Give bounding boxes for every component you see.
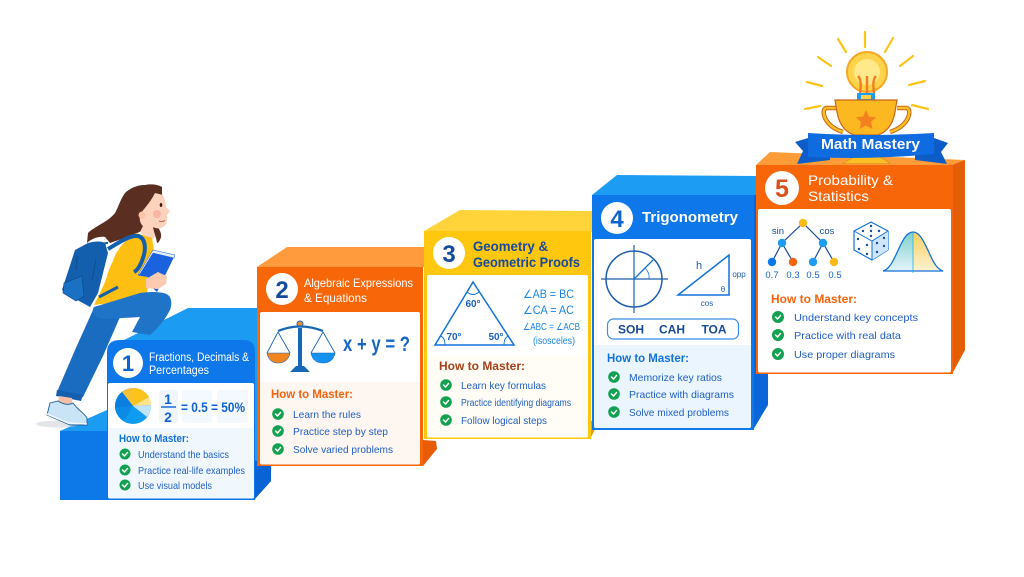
title 3: Geometry & xyxy=(473,238,548,254)
step 5: probability and statistics xyxy=(756,152,965,374)
badge 2 xyxy=(266,273,298,305)
trophy with light bulb and Math Mastery ribbon xyxy=(795,32,948,164)
probability tree: sin xyxy=(772,226,784,237)
how to master 4: How to Master: xyxy=(607,351,689,365)
SOH CAH TOA box: CAH xyxy=(659,322,685,336)
how to master 4: Solve mixed problems xyxy=(629,407,729,419)
icon: dice xyxy=(854,222,888,260)
title 1: Percentages xyxy=(149,365,209,377)
content card 3 xyxy=(427,275,588,438)
triangle diagram: 60° xyxy=(465,299,481,310)
ankle xyxy=(58,396,72,406)
badge 2: 2 xyxy=(275,277,289,304)
right triangle diagram: cos xyxy=(701,299,713,308)
how to master 5: Practice with real data xyxy=(794,330,901,342)
how to master 3: Practice identifying diagrams xyxy=(461,397,571,409)
step 4: trigonometry xyxy=(592,175,768,430)
unit circle diagram xyxy=(601,245,668,313)
isosceles proof: ∠CA = AC xyxy=(523,305,574,317)
badge 5: 5 xyxy=(775,175,789,203)
content card 4 xyxy=(594,239,751,428)
SOH CAH TOA box: SOH xyxy=(618,322,644,336)
right triangle diagram xyxy=(678,255,746,308)
how to master 1: Use visual models xyxy=(138,480,212,492)
title 3: Geometric Proofs xyxy=(473,254,580,270)
fraction equation: = 0.5 = 50% xyxy=(181,399,245,415)
how to master 5: Use proper diagrams xyxy=(794,349,895,361)
title 5 xyxy=(808,172,894,204)
block 3D shape xyxy=(592,175,768,430)
isosceles proof: ∠ABC = ∠ACB xyxy=(523,322,580,333)
book xyxy=(138,250,175,292)
title 1 xyxy=(149,352,249,377)
how to master 4 xyxy=(607,351,734,419)
step 2: algebraic expressions and equations xyxy=(257,247,437,466)
ribbon: Math Mastery xyxy=(795,133,948,164)
how to master 3: Learn key formulas xyxy=(461,380,546,392)
ribbon: Math Mastery: Math Mastery xyxy=(821,136,921,153)
SOH CAH TOA box: TOA xyxy=(701,322,727,336)
triangle diagram: 50° xyxy=(488,332,504,343)
how to master 4: Practice with diagrams xyxy=(629,389,734,401)
probability tree: 0.5 xyxy=(806,270,820,281)
arm xyxy=(106,243,148,289)
block 3D shape xyxy=(424,210,598,439)
character: student climbing with backpack and book xyxy=(36,184,175,428)
icon: light bulb xyxy=(847,52,887,100)
how to master 2: Practice step by step xyxy=(293,426,388,438)
content card 1 xyxy=(108,383,254,498)
title 3 xyxy=(473,238,580,270)
how to master 1 xyxy=(119,433,245,492)
badge 3 xyxy=(433,237,465,269)
yellow shirt xyxy=(94,233,154,305)
equation x + y = ?: x + y = ? xyxy=(343,333,410,356)
backpack straps xyxy=(108,236,145,272)
how to master 1: Practice real-life examples xyxy=(138,465,245,477)
how to master 3 xyxy=(439,359,571,427)
shoe xyxy=(47,401,87,425)
right triangle diagram: h xyxy=(696,260,702,272)
title 4: Trigonometry xyxy=(642,209,739,226)
title 2 xyxy=(304,276,413,305)
how to master 1: How to Master: xyxy=(119,433,189,445)
step 3: geometry and geometric proofs xyxy=(424,210,598,439)
how to master 1: Understand the basics xyxy=(138,449,229,461)
fraction equation xyxy=(159,390,248,425)
how to master 4: Memorize key ratios xyxy=(629,372,722,384)
content card 2 xyxy=(260,312,420,464)
how to master 3: How to Master: xyxy=(439,359,525,373)
probability tree: 0.3 xyxy=(786,270,800,281)
badge 1: 1 xyxy=(122,351,134,376)
title 5: Probability & xyxy=(808,172,894,188)
how to master 2: Solve varied problems xyxy=(293,444,393,456)
icon: trophy cup xyxy=(824,100,909,135)
how to master 5 xyxy=(771,292,918,361)
isosceles proof: ∠AB = BC xyxy=(523,289,574,301)
backpack xyxy=(62,242,108,307)
how to master 2: Learn the rules xyxy=(293,409,361,421)
step 1: fractions, decimals and percentages xyxy=(60,308,271,500)
how to master 2: How to Master: xyxy=(271,387,353,401)
isosceles proof: (isosceles) xyxy=(533,336,575,347)
face and neck xyxy=(140,193,170,243)
triangle diagram xyxy=(435,282,514,345)
front leg xyxy=(93,292,171,335)
probability tree: 0.5 xyxy=(828,270,842,281)
title 5: Statistics xyxy=(808,188,869,204)
badge 4 xyxy=(601,202,633,234)
badge 1 xyxy=(113,348,143,378)
how to master 2 xyxy=(271,387,393,456)
right triangle diagram: opp xyxy=(732,270,746,279)
how to master 3: Follow logical steps xyxy=(461,415,547,427)
probability tree: cos xyxy=(820,226,835,237)
hair strand by neck xyxy=(152,222,161,243)
title 1: Fractions, Decimals & xyxy=(149,352,249,364)
back leg xyxy=(57,310,120,397)
fraction equation: 1 xyxy=(164,391,172,407)
content card 5 xyxy=(758,209,951,372)
how to master 5: How to Master: xyxy=(771,292,857,306)
hair back xyxy=(87,184,162,243)
badge 5 xyxy=(765,171,799,205)
badge 4: 4 xyxy=(610,206,624,233)
probability tree: 0.7 xyxy=(765,270,779,281)
bell curve xyxy=(883,232,943,273)
block 3D shape xyxy=(756,152,965,374)
fraction equation: 2 xyxy=(164,409,172,425)
light rays xyxy=(805,32,928,109)
icon: balance scale xyxy=(267,321,335,372)
badge 3: 3 xyxy=(442,241,456,268)
probability tree xyxy=(765,219,842,281)
block 3D shape xyxy=(257,247,437,466)
block 3D shape xyxy=(60,308,271,500)
title 2: & Equations xyxy=(304,291,367,305)
icon: pie chart xyxy=(115,388,151,424)
SOH CAH TOA box xyxy=(608,319,738,339)
how to master 5: Understand key concepts xyxy=(794,312,918,324)
right triangle diagram: θ xyxy=(721,285,726,294)
title 2: Algebraic Expressions xyxy=(304,276,413,290)
isosceles proof xyxy=(523,289,580,347)
triangle diagram: 70° xyxy=(446,332,462,343)
